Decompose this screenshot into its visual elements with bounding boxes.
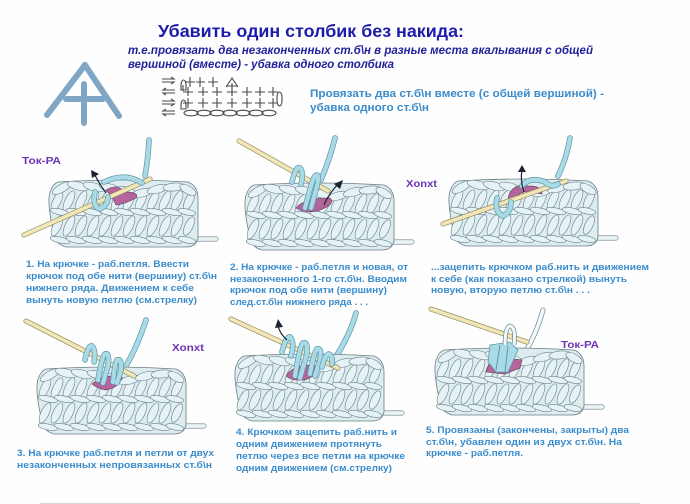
- panel: step 6 illustration: [431, 309, 602, 415]
- panel: step 1 illustration: [24, 140, 216, 247]
- step 4 text: [17, 448, 215, 471]
- step 3 text: к себе (как показано стрелкой) вынуть: [431, 274, 627, 285]
- chart caption: [310, 88, 604, 114]
- step 2 text: 2. На крючке - раб.петля и новая, от: [230, 262, 408, 273]
- step 6 text: 5. Провязаны (закончены, закрыты) два: [426, 425, 630, 436]
- step 1 text: крючок под обе нити (вершину) ст.б\н: [26, 271, 217, 282]
- step 2 text: след.ст.б\н нижнего ряда . . .: [230, 297, 368, 308]
- step 6 text: крючке - раб.петля.: [426, 448, 523, 459]
- label: Xonxt: Xonxt: [172, 342, 205, 354]
- step 3 text: ...зацепить крючком раб.нить и движением: [431, 262, 649, 273]
- icon: decrease symbol: [47, 65, 119, 123]
- panel: step 5 illustration: [231, 313, 402, 421]
- subtitle: вершиной (вместе) - убавка одного столбика: [128, 59, 395, 71]
- step 5 text: 4. Крючком зацепить раб.нить и: [236, 427, 397, 438]
- label: Tok-RA: Ток-РА: [561, 339, 599, 351]
- step 5 text: одним движением (см.стрелку): [236, 463, 392, 474]
- step 1 text: [26, 259, 217, 306]
- subtitle: [128, 45, 593, 71]
- panel: step 2 illustration: [239, 138, 412, 250]
- step 5 text: одним движением протянуть: [236, 439, 382, 450]
- step 5 text: [236, 427, 405, 474]
- step 2 text: крючок под обе нити (вершину): [230, 285, 387, 296]
- step 6 text: [426, 425, 630, 459]
- step 2 text: [230, 262, 408, 308]
- chart caption: Провязать два ст.б\н вместе (с общей вершиной) -: [310, 88, 604, 100]
- chart caption: убавка одного ст.б\н: [310, 102, 429, 114]
- step 1 text: 1. На крючке - раб.петля. Ввести: [26, 259, 189, 270]
- panel: step 4 illustration: [26, 320, 204, 434]
- panel: step 3 illustration: [443, 138, 616, 246]
- step 6 text: ст.б\н, убавлен один из двух ст.б\н. На: [426, 437, 623, 448]
- step 1 text: вынуть новую петлю (см.стрелку): [26, 295, 197, 306]
- subtitle: т.е.провязать два незаконченных ст.б\н в разные места вкалывания с общей: [128, 45, 593, 57]
- crochet chart: [162, 77, 282, 116]
- step 3 text: [431, 262, 649, 296]
- step 4 text: незаконченных непровязанных ст.б\н: [17, 460, 212, 471]
- step 4 text: 3. На крючке раб.петля и петли от двух: [17, 448, 215, 459]
- label: Tok-RA: Ток-РА: [22, 155, 61, 167]
- title: Убавить один столбик без накида:: [158, 21, 464, 41]
- label: Xonxt: Xonxt: [406, 178, 438, 190]
- step 5 text: петлю через все петли на крючке: [236, 451, 405, 462]
- step 1 text: нижнего ряда. Движением к себе: [26, 283, 194, 294]
- step 2 text: незаконченного 1-го ст.б\н. Вводим: [230, 274, 407, 285]
- step 3 text: новую, вторую петлю ст.б\н . . .: [431, 285, 590, 296]
